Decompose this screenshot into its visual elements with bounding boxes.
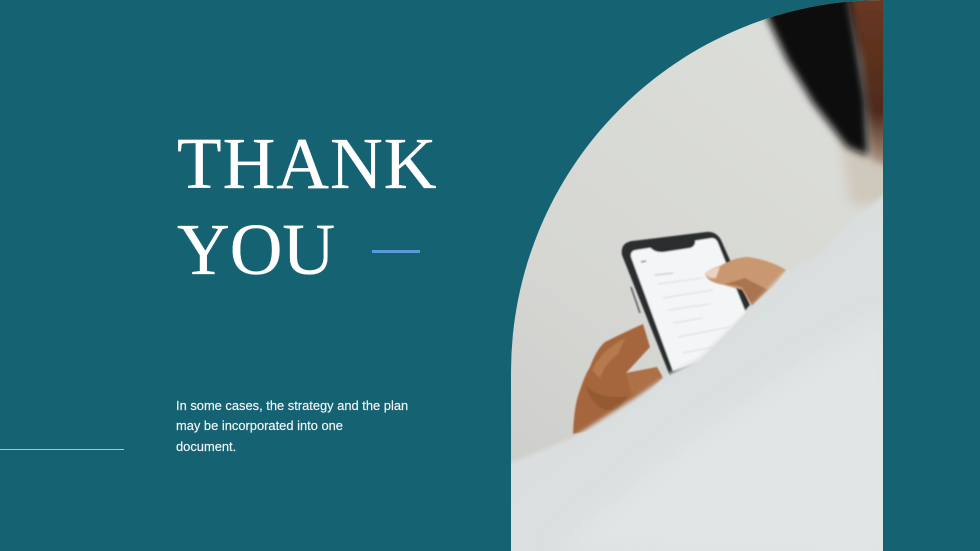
phone body: [622, 232, 750, 376]
phone side buttons: [631, 287, 640, 313]
notch: [649, 240, 695, 252]
shirt shading: [560, 320, 890, 551]
neck and skin: [838, 136, 883, 208]
accent dash: [372, 250, 420, 253]
left rule: [0, 449, 124, 450]
hair: [758, 0, 868, 156]
title: THANK: THANK: [177, 123, 437, 204]
photo panel: hand holding phone in arch: [511, 0, 883, 551]
body text: may be incorporated into one: [176, 418, 343, 433]
blurred shirt foreground: [511, 194, 883, 551]
title: YOU: YOU: [177, 209, 335, 290]
phone: [622, 232, 750, 376]
back arrow: [641, 261, 646, 262]
phone screen: [631, 238, 746, 371]
wall background: [511, 0, 882, 466]
right thumb: [705, 257, 786, 306]
left hand: [573, 324, 663, 434]
body text: [176, 398, 408, 454]
body text: document.: [176, 439, 236, 454]
body text: In some cases, the strategy and the plan: [176, 398, 408, 413]
screen list lines: [655, 273, 730, 353]
